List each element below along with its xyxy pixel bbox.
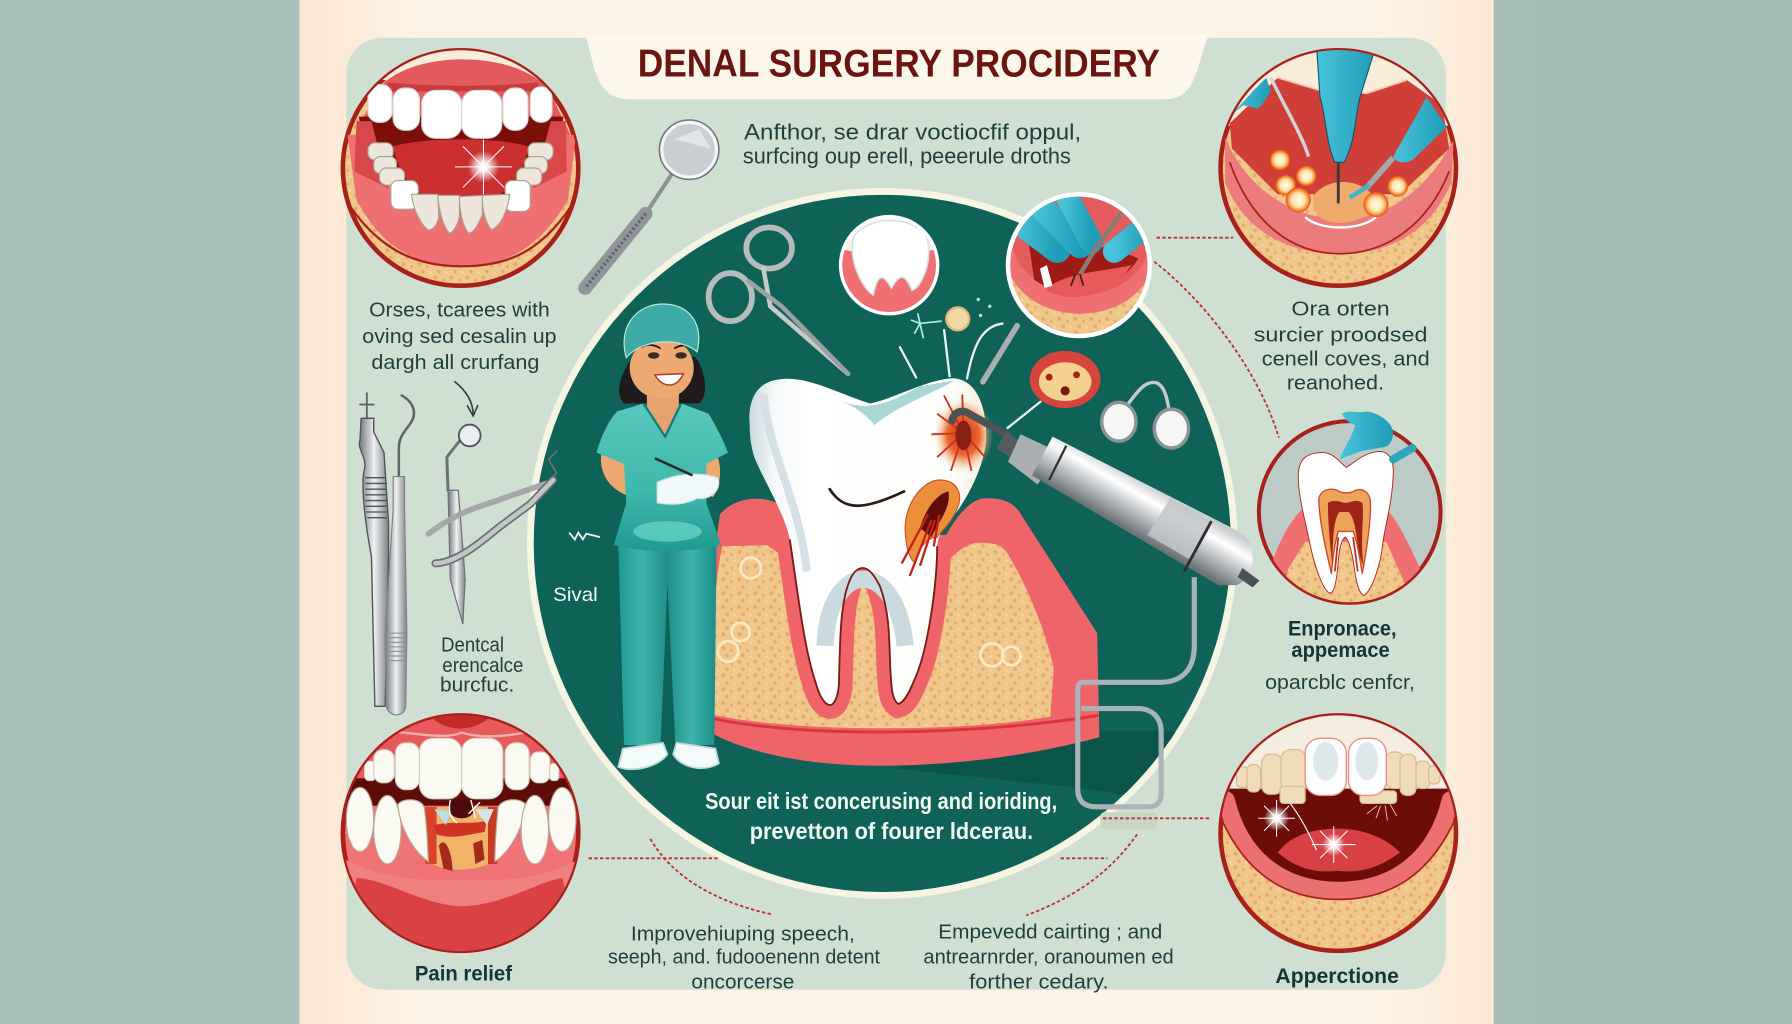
text: bottom centre left: Improvehiuping speech, [631, 923, 855, 946]
pulp [1319, 489, 1370, 574]
lower lip [1226, 800, 1450, 890]
sparkle [467, 151, 499, 183]
text: upper left: Orses, tcarees with [369, 299, 550, 322]
caption inside circle: Sour eit ist concerusing and ioriding, [705, 788, 1057, 814]
arrow [455, 382, 478, 416]
shoes [618, 743, 719, 769]
illustration: scissors [709, 227, 848, 374]
intro text block [743, 119, 1081, 168]
text: bottom centre right: antrearnrder, oranoumen ed [923, 945, 1174, 968]
cream sheet [299, 0, 1494, 1024]
gum dish [1313, 182, 1374, 223]
upper lip [354, 59, 571, 137]
panel: main green card [346, 38, 1446, 990]
text: bottom centre right [923, 920, 1174, 994]
tooth [1298, 451, 1393, 595]
pants [618, 545, 717, 745]
mouth interior [359, 117, 563, 213]
pink band [1225, 137, 1454, 254]
label: pain relief: Pain relief [415, 961, 513, 986]
lower lip [389, 186, 534, 245]
glowing teeth [1270, 150, 1290, 170]
illustration: inset healthy tooth [838, 214, 940, 316]
lower teeth [368, 143, 553, 233]
pale cord shadow [1101, 813, 1158, 830]
text: mid right: oparcblc cenfcr, [1265, 671, 1415, 694]
cap [624, 304, 699, 358]
scrub top [597, 403, 728, 551]
side teeth [1237, 750, 1440, 803]
text: mid right [1265, 615, 1415, 694]
forceps [359, 393, 389, 706]
illustration: handpiece drill [952, 411, 1259, 807]
smile [830, 489, 904, 506]
root outline [790, 539, 937, 705]
sparkles [1264, 806, 1289, 831]
illustration: paired lamp heads [1102, 382, 1189, 448]
lower teeth [346, 787, 576, 864]
circle: healed mouth bottom right [1211, 709, 1465, 951]
label: apperctione: Apperctione [1275, 963, 1399, 988]
bottom red lip [355, 878, 565, 951]
pliers [429, 451, 557, 563]
title: DENAL SURGERY PROCIDERY [638, 43, 1160, 86]
text: upper right: reanohed. [1287, 372, 1384, 395]
upper gum [355, 715, 566, 782]
cavity [905, 480, 960, 562]
panel: central green circle [527, 188, 1238, 899]
cream upper sliver [382, 50, 539, 80]
text: upper left [362, 299, 557, 374]
hair [619, 357, 705, 403]
dark band [341, 778, 581, 806]
upper teeth [365, 738, 559, 799]
illustration: mirror instrument [585, 120, 719, 288]
text: upper right: Ora orten [1291, 297, 1390, 320]
text: upper right: cenell coves, and [1262, 348, 1430, 371]
illustration: inset surgical hands [1006, 189, 1154, 338]
probe [385, 395, 414, 715]
intro text block: surfcing oup erell, peeerule droths [743, 143, 1071, 168]
text: dental caption [440, 633, 523, 696]
grey shading around root fork [825, 579, 905, 646]
floor shadow [893, 731, 1176, 795]
left instruments [359, 382, 557, 715]
text: dental caption: erencalce [442, 654, 523, 677]
text: bottom centre right: forther cedary. [969, 971, 1109, 994]
mouth interior [1227, 789, 1449, 887]
circle: surgery close-up top right [1218, 46, 1458, 286]
text: bottom centre left: oncorcerse [691, 971, 794, 994]
text: mid right: appemace [1291, 637, 1390, 662]
illustration: cross-section disc [1030, 351, 1101, 408]
intro text block: Anfthor, se drar voctiocfif oppul, [744, 119, 1081, 144]
text: bottom centre right: Empevedd cairting ; and [938, 920, 1162, 943]
front teeth [1305, 738, 1386, 795]
caption inside circle [705, 788, 1057, 844]
arms [601, 455, 657, 501]
illustration: nurse [597, 304, 728, 769]
circle: open mouth top left [341, 46, 581, 286]
small scribble [569, 533, 600, 539]
enamel highlight [840, 381, 954, 425]
lower gum [346, 860, 575, 951]
illustration: gum and bone block [706, 498, 1099, 766]
title tab [585, 34, 1209, 99]
dashed connectors [589, 238, 1279, 915]
text: upper left: oving sed cesalin up [362, 325, 557, 348]
connector lines to the tooth [899, 323, 1041, 429]
illustration: main tooth [749, 378, 993, 705]
sparkle and coin [911, 298, 991, 338]
text: upper right: surcier proodsed [1254, 324, 1427, 347]
small mirror [447, 425, 481, 624]
text: dental caption: Dentcal [441, 633, 504, 656]
gloved tools [1317, 46, 1376, 162]
text: mid right: Enpronace, [1288, 615, 1397, 640]
upper teeth [368, 85, 552, 138]
text: upper left: dargh all crurfang [371, 351, 539, 374]
glove [657, 474, 719, 504]
circle: tooth with root canal [1257, 411, 1446, 606]
neck and face [647, 389, 679, 437]
text: bottom centre left: seeph, and. fudooenenn detent [608, 945, 880, 968]
text: bottom centre left [608, 923, 880, 994]
label: Sival: Sival [553, 584, 598, 606]
text: upper right [1254, 297, 1430, 395]
red mouth [1230, 78, 1449, 194]
decay spot [934, 399, 993, 472]
tongue [1278, 829, 1400, 871]
stick from inset [983, 326, 1017, 382]
circle: decayed tooth bottom left [341, 713, 583, 960]
glove [1339, 411, 1413, 459]
caption inside circle: prevetton of fourer ldcerau. [750, 818, 1033, 844]
decay [434, 821, 487, 837]
text: dental caption: burcfuc. [440, 673, 514, 696]
